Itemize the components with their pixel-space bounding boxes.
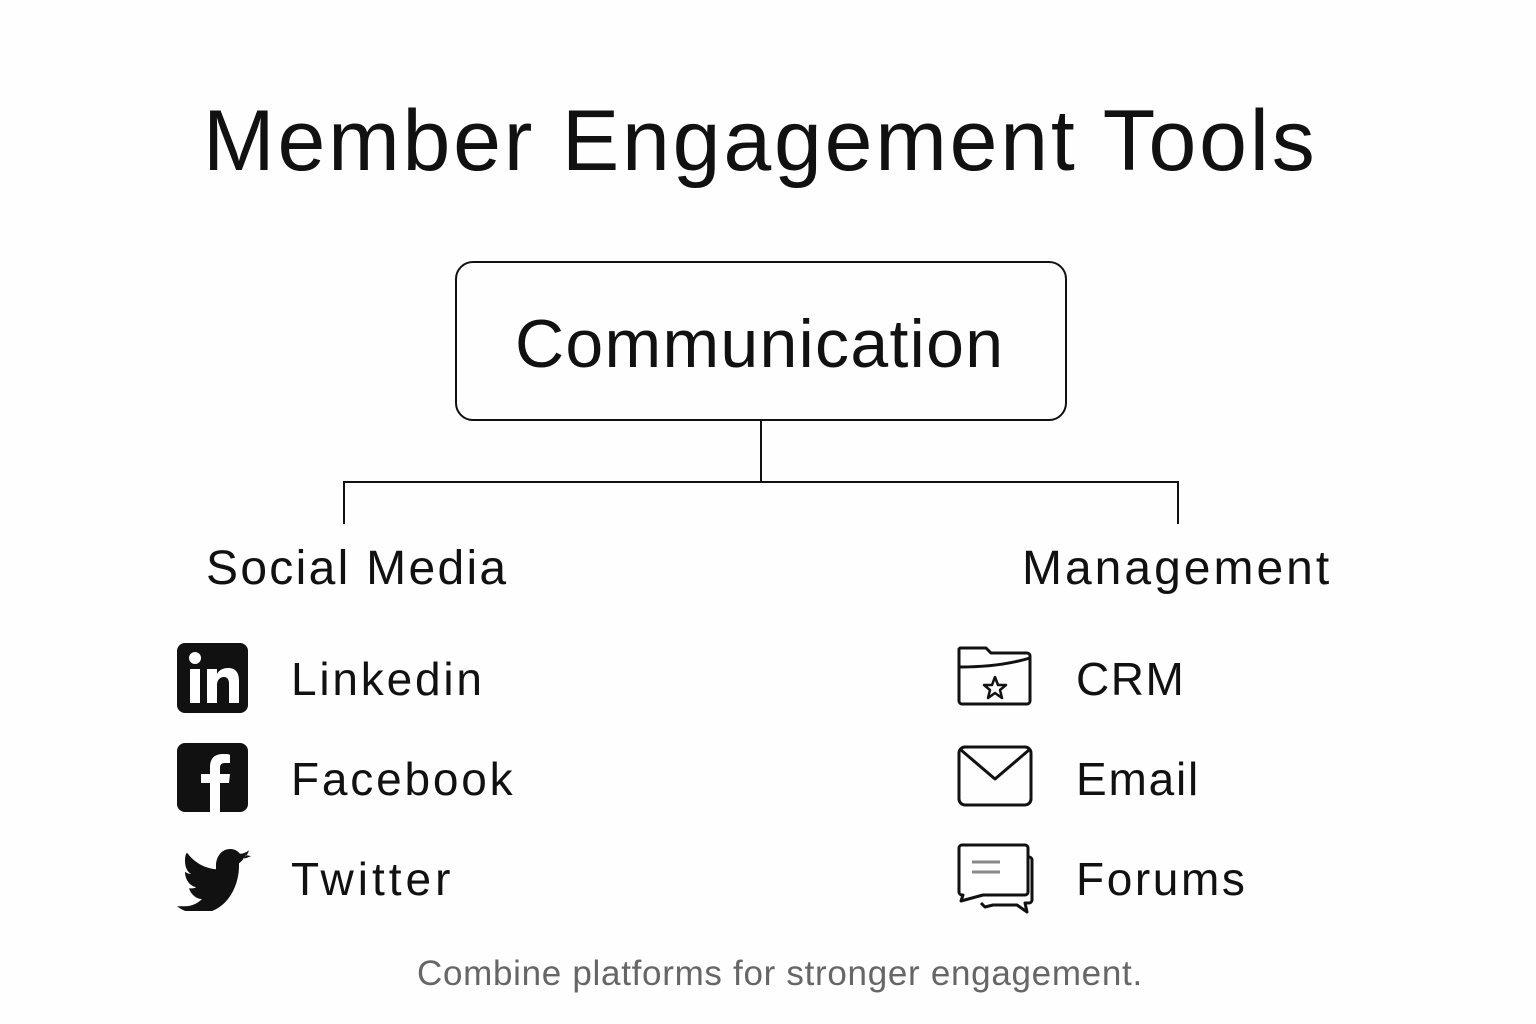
item: facebook: Facebook	[291, 753, 515, 805]
box: communication: Communication	[515, 306, 1004, 382]
icon: chat bubbles	[958, 844, 1034, 914]
icon: envelope	[958, 746, 1032, 806]
item: linkedin	[177, 643, 485, 713]
icon: facebook	[177, 743, 248, 812]
heading: social media: Social Media	[206, 542, 508, 595]
item: email	[958, 746, 1200, 806]
item: forums	[958, 844, 1248, 914]
item: forums: Forums	[1076, 853, 1248, 905]
icon: folder star	[958, 646, 1032, 706]
box: communication	[455, 261, 1067, 421]
item: crm	[958, 646, 1185, 706]
item: linkedin: Linkedin	[291, 653, 485, 705]
item: email: Email	[1076, 753, 1200, 805]
icon: linkedin	[177, 643, 248, 713]
icon: twitter	[177, 849, 251, 911]
footer caption: Combine platforms for stronger engagement.	[417, 954, 1143, 993]
item: twitter: Twitter	[291, 853, 454, 905]
title: Member Engagement Tools	[203, 93, 1318, 189]
item: facebook	[177, 743, 515, 812]
heading: management: Management	[1022, 542, 1332, 595]
item: twitter	[177, 849, 454, 911]
item: crm: CRM	[1076, 653, 1185, 705]
